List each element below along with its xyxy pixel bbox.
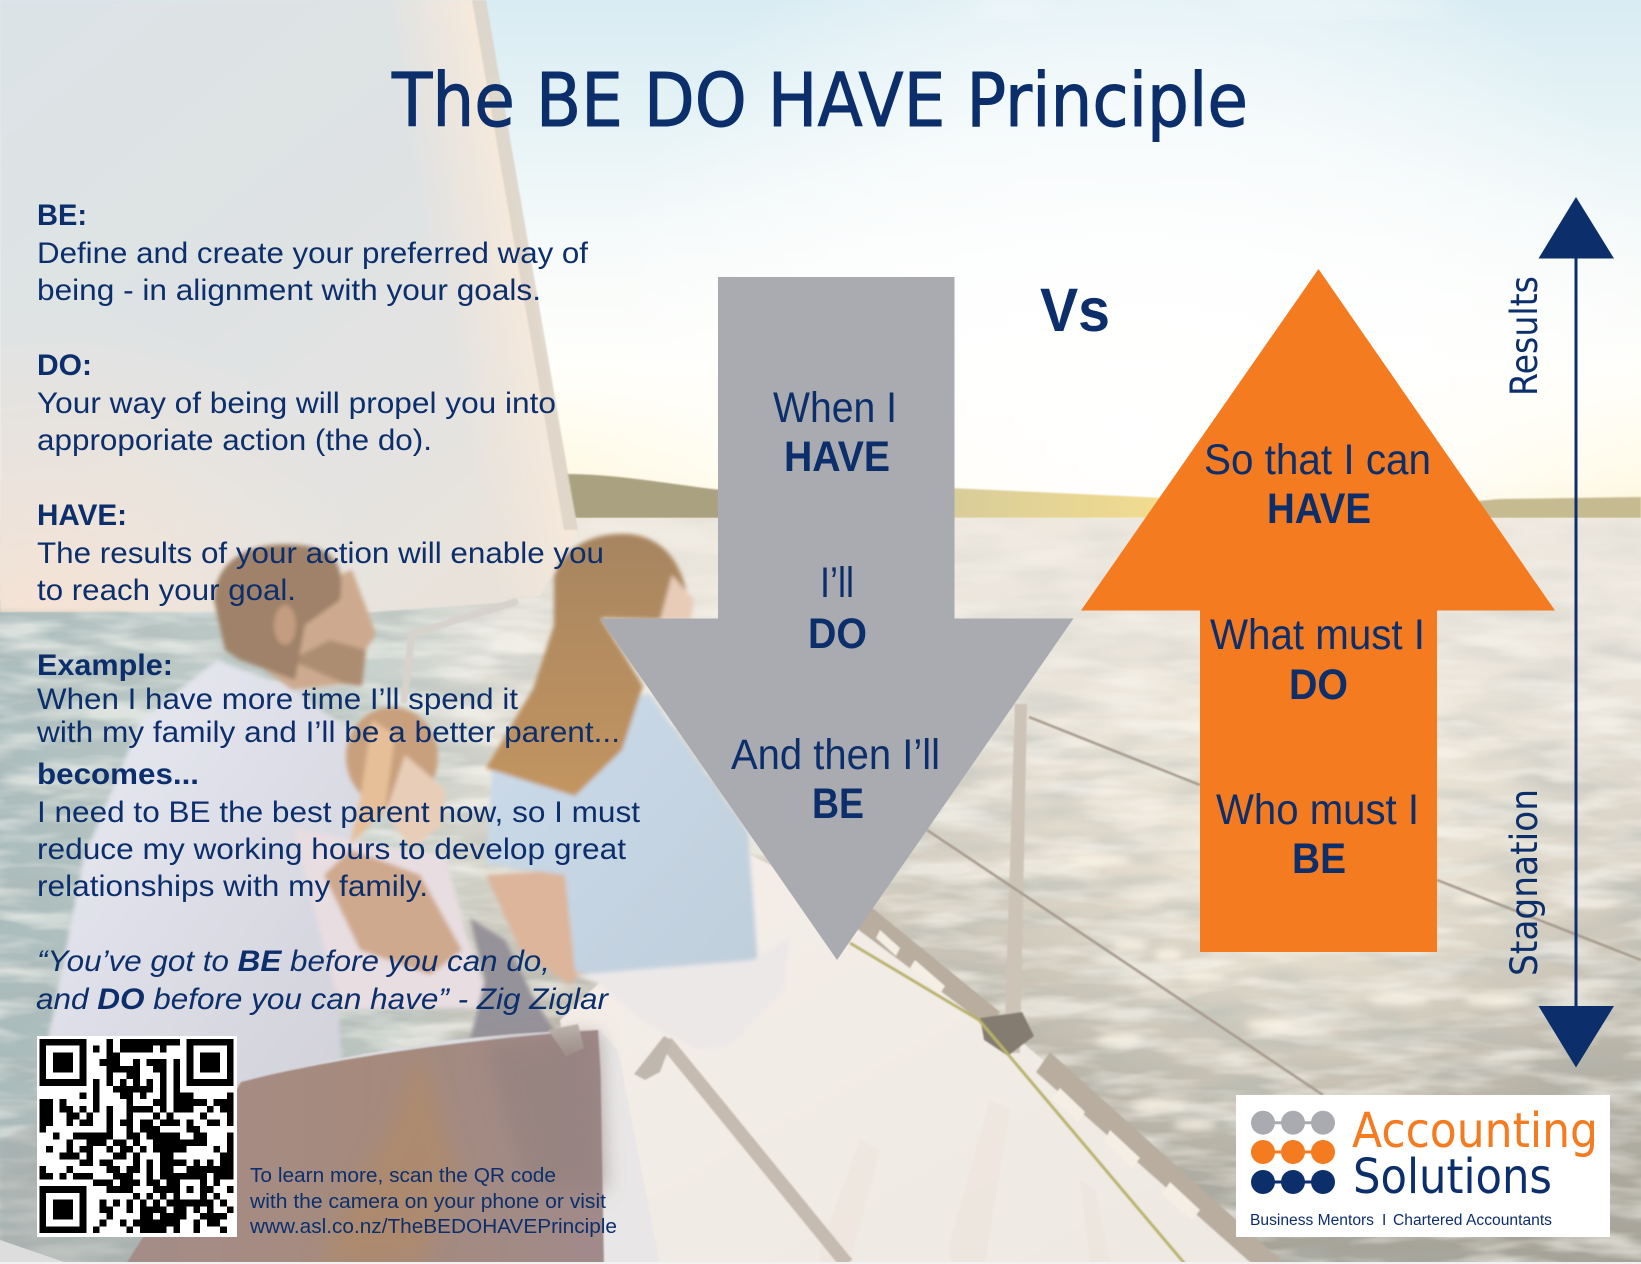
grey arrow: when I have, I'll do, and then I'll be: BE [812,780,864,828]
logo panel: Accounting Solutions [1236,1095,1610,1237]
bottom left hull [0,1020,250,1264]
text block: example: relationships with my family. [37,870,428,903]
text block: BE: Define and create your preferred way of [37,237,589,270]
label: stagnation: Stagnation [1503,789,1546,976]
text block: HAVE: to reach your goal. [37,574,296,607]
quote: “You’ve got to BE before you can do, [37,945,550,978]
grey arrow: when I have, I'll do, and then I'll be: And then I’ll [731,731,940,779]
text block: example: Example: [37,649,173,682]
quote: and DO before you can have” - Zig Ziglar [36,983,609,1016]
text block: HAVE [37,499,604,607]
text block: DO: Your way of being will propel you into [37,387,556,420]
bottom edge strip [0,1262,1641,1264]
logo panel: Accounting Solutions: Business Mentors [1250,1212,1374,1229]
text block: DO: DO: [37,349,92,382]
text block: example: with my family and I’ll be a better parent... [36,716,620,749]
text block: HAVE: HAVE: [37,499,127,532]
QR caption: To learn more, scan the QR code [250,1165,556,1187]
QR caption [249,1165,617,1238]
logo panel: Accounting Solutions: Solutions [1353,1149,1552,1205]
grey arrow: when I have, I'll do, and then I'll be [600,277,1074,960]
label: results: Results [1503,276,1546,396]
text block: HAVE: The results of your action will enable you [37,537,604,570]
text block: DO [37,349,556,457]
grey arrow: when I have, I'll do, and then I'll be: HAVE [784,433,890,481]
orange arrow: who must I be, what must I do, so that I can have: Who must I [1216,786,1419,834]
text block: BE: BE: [37,199,87,232]
logo panel: Accounting Solutions: Accounting [1352,1103,1598,1159]
orange arrow: who must I be, what must I do, so that I can have: So that I can [1204,436,1431,484]
sun glints on water [1070,855,1536,1130]
grey arrow: when I have, I'll do, and then I'll be: I’ll [820,559,854,607]
QR caption: www.asl.co.nz/TheBEDOHAVEPrinciple [249,1216,617,1238]
orange arrow: who must I be, what must I do, so that I can have: DO [1289,661,1348,709]
logo panel: Accounting Solutions: I [1382,1212,1386,1229]
man [44,544,384,1110]
text block: example: I need to BE the best parent now, so I must [37,796,641,829]
grey arrow: when I have, I'll do, and then I'll be: When I [773,384,897,432]
railing pipe [404,602,515,700]
text block: example: reduce my working hours to develop great [37,833,627,866]
orange arrow: who must I be, what must I do, so that I can have [1081,269,1555,952]
grab rail [666,1042,847,1264]
stanchion post and wires [1004,704,1027,1053]
orange arrow: who must I be, what must I do, so that I can have: What must I [1210,611,1425,659]
text block: example [36,649,641,903]
grey arrow: when I have, I'll do, and then I'll be: DO [808,610,867,658]
text block: example: When I have more time I’ll spend it [37,683,519,716]
Vs label: Vs [1040,276,1110,344]
text block: BE: being - in alignment with your goals. [37,274,541,307]
quote [36,945,609,1016]
title: The BE DO HAVE Principle [391,58,1248,144]
orange arrow: who must I be, what must I do, so that I can have: HAVE [1267,485,1371,533]
logo panel: Accounting Solutions: Chartered Accountants [1393,1212,1552,1229]
text block: BE [37,199,589,307]
woman [486,534,790,1050]
scale arrow: stagnation to results [1503,197,1614,1068]
QR code [37,1036,237,1237]
QR caption: with the camera on your phone or visit [249,1191,606,1213]
cockpit [126,1024,660,1264]
child [293,707,560,1040]
text block: DO: approporiate action (the do). [37,424,432,457]
text block: example: becomes... [37,758,199,791]
orange arrow: who must I be, what must I do, so that I can have: BE [1292,835,1346,883]
deck [560,850,1283,1264]
sail [0,0,578,613]
icon: abacus dots [1251,1111,1335,1194]
